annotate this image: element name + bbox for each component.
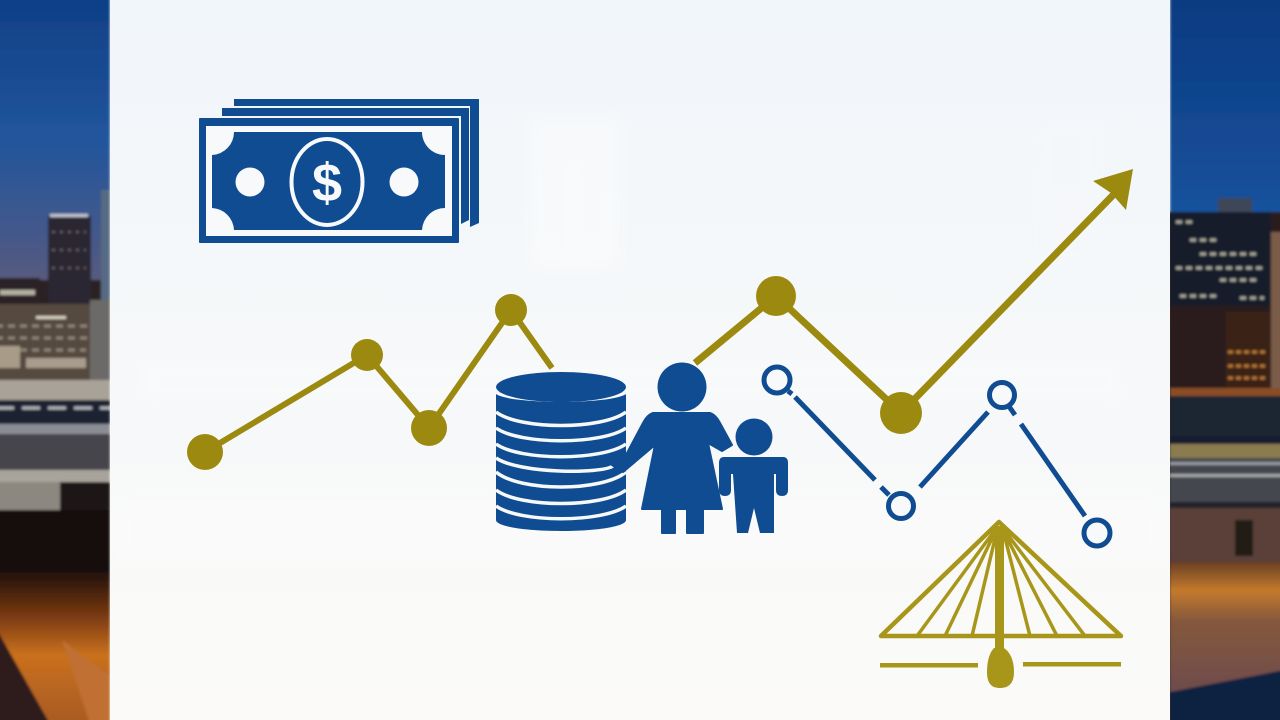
icon: stack of dollar bills: $ <box>312 153 342 213</box>
blue open-circle line chart <box>764 367 1110 546</box>
icon: cable bridge <box>880 522 1121 688</box>
right city photo strip <box>1168 0 1280 720</box>
icon: mother and child <box>612 362 788 533</box>
icon: coin stack <box>496 372 626 531</box>
gold rising line chart with arrow <box>187 169 1133 470</box>
left city photo strip <box>0 0 110 720</box>
icon: stack of dollar bills <box>199 99 479 243</box>
